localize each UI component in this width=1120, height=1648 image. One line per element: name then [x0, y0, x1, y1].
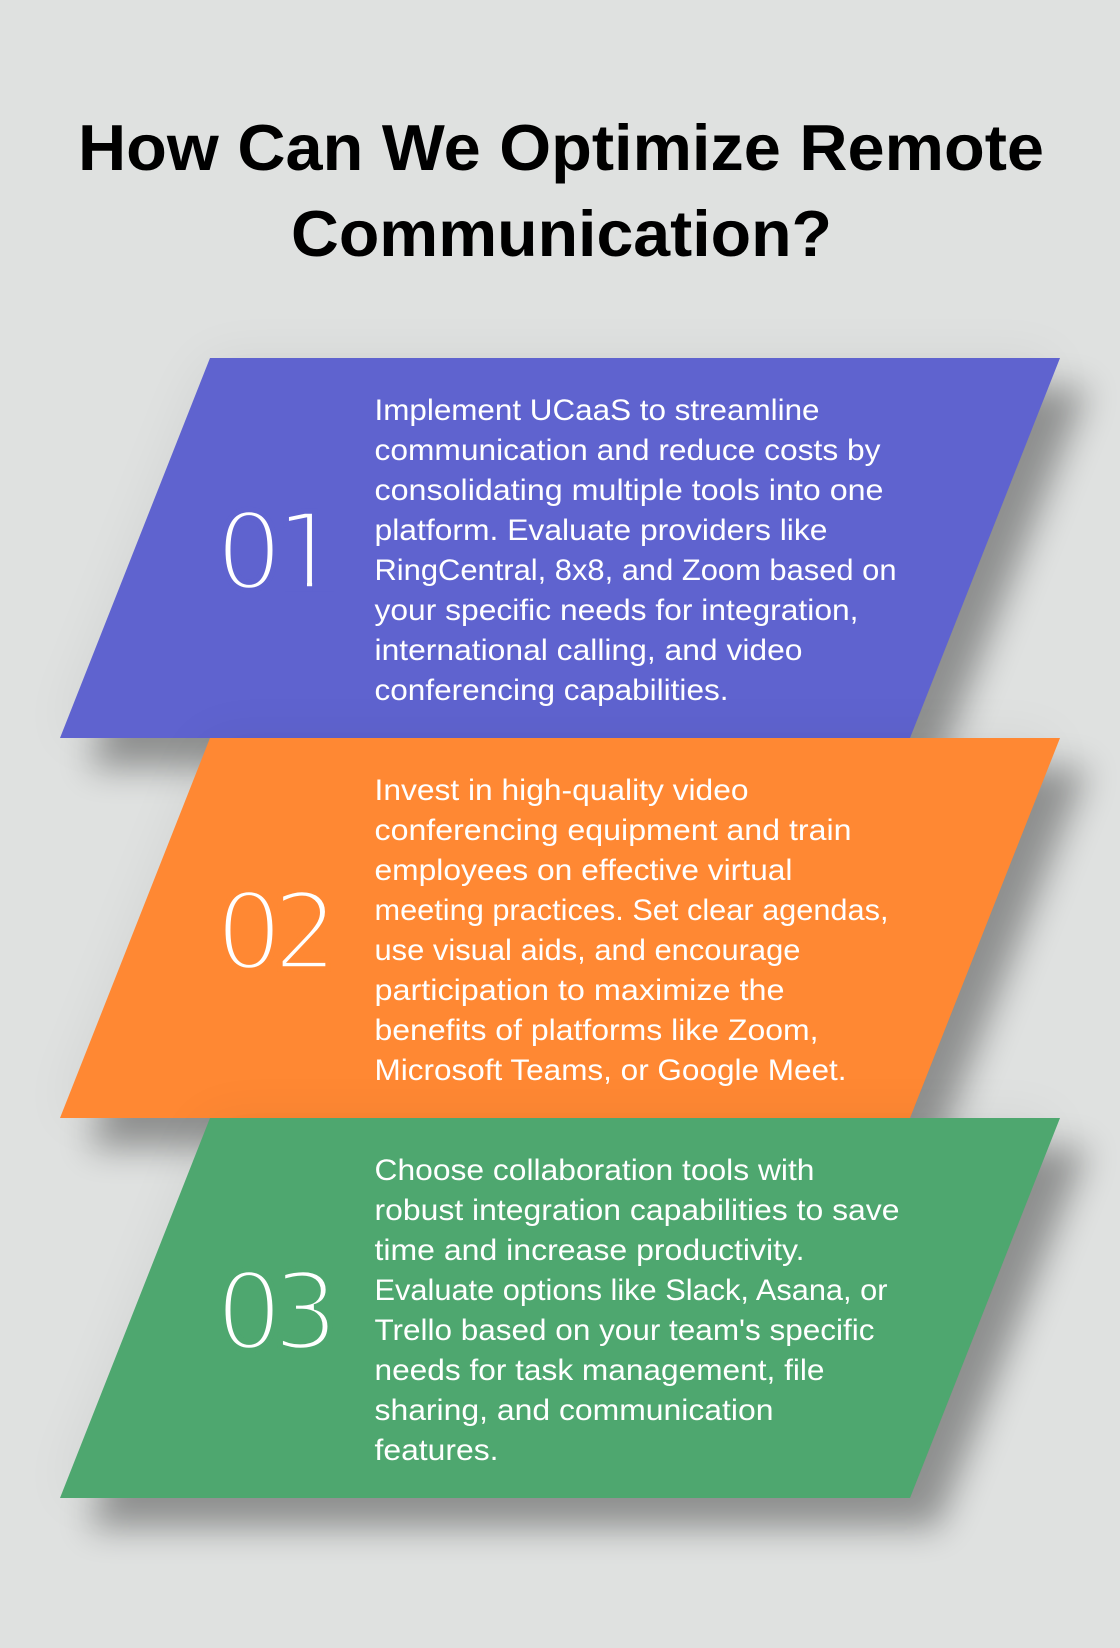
step 01 description — [374, 394, 896, 707]
step 03 description: robust integration capabilities to save — [374, 1194, 900, 1227]
step 02 description: Microsoft Teams, or Google Meet. — [374, 1054, 846, 1087]
title: How Can We Optimize Remote — [78, 111, 1044, 184]
step 01 description: your specific needs for integration, — [374, 594, 858, 627]
step 01 description: Implement UCaaS to streamline — [374, 394, 820, 427]
step 01 description: platform. Evaluate providers like — [374, 514, 828, 547]
step 03 description: time and increase productivity. — [374, 1234, 804, 1267]
step 02 description: meeting practices. Set clear agendas, — [374, 894, 888, 927]
title: Communication? — [291, 197, 832, 270]
step 01 description: communication and reduce costs by — [374, 434, 880, 467]
panel shape: green parallelogram — [60, 1118, 1060, 1498]
step 02 description: employees on effective virtual — [374, 854, 792, 887]
step 02 description: use visual aids, and encourage — [374, 934, 800, 967]
step 01 description: international calling, and video — [374, 634, 802, 667]
step number 02: 02 — [216, 870, 329, 994]
step 01 description: consolidating multiple tools into one — [374, 474, 884, 507]
step 03 description: Evaluate options like Slack, Asana, or — [374, 1274, 888, 1307]
panel: step 02 — [60, 738, 1060, 1118]
step 03 description: features. — [374, 1434, 498, 1467]
step 03 description: Trello based on your team's specific — [374, 1314, 874, 1347]
step 03 description — [374, 1154, 900, 1467]
panel shape: purple parallelogram — [60, 358, 1060, 738]
title — [78, 111, 1044, 270]
panel shape: orange parallelogram — [60, 738, 1060, 1118]
step number 01: 01 — [216, 490, 332, 614]
step 02 description — [374, 774, 888, 1087]
step 01 description: conferencing capabilities. — [374, 674, 728, 707]
step number 03: 03 — [216, 1250, 330, 1374]
step 02 description: Invest in high-quality video — [374, 774, 748, 807]
step 02 description: benefits of platforms like Zoom, — [374, 1014, 818, 1047]
step 03 description: Choose collaboration tools with — [374, 1154, 814, 1187]
panel: step 03 — [60, 1118, 1060, 1498]
step 02 description: conferencing equipment and train — [374, 814, 852, 847]
step 03 description: needs for task management, file — [374, 1354, 824, 1387]
step 02 description: participation to maximize the — [374, 974, 784, 1007]
panel: step 01 — [60, 358, 1060, 738]
step 01 description: RingCentral, 8x8, and Zoom based on — [374, 554, 896, 587]
step 03 description: sharing, and communication — [374, 1394, 774, 1427]
